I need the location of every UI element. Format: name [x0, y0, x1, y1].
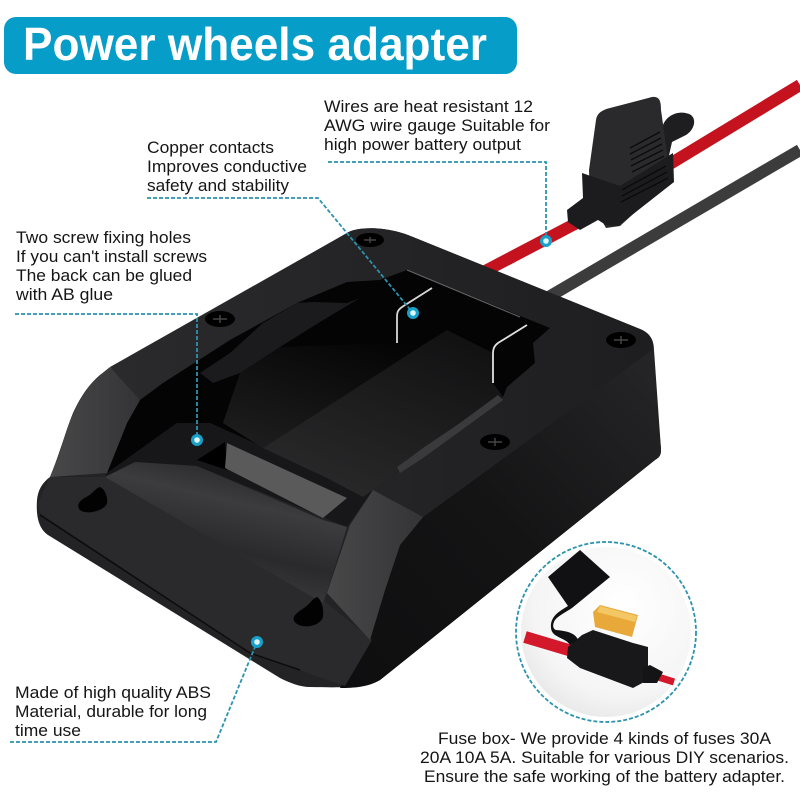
callout: fuse box: 20A 10A 5A. Suitable for various DIY scenarios. — [420, 748, 789, 767]
inset fuse holder strap and cap — [548, 550, 610, 645]
fuse inset — [516, 542, 696, 722]
callout: screw holes: If you can't install screws — [16, 247, 207, 266]
recess — [107, 270, 550, 497]
red wire — [470, 85, 800, 279]
callout: ABS material: Material, durable for long — [15, 702, 207, 721]
callout: copper contacts: Copper contacts — [147, 138, 274, 157]
callout: screw holes: with AB glue — [15, 285, 113, 304]
inset dashed ring — [516, 542, 696, 722]
screw top — [356, 233, 384, 247]
inset red wire — [525, 637, 572, 651]
recess rim highlight — [407, 270, 520, 317]
callout: ABS material — [10, 642, 257, 742]
callout: screw holes — [15, 228, 207, 440]
inline fuse holder — [567, 97, 694, 230]
front rim — [38, 477, 372, 686]
callout: wires: AWG wire gauge Suitable for — [324, 116, 550, 135]
contact left — [397, 288, 432, 343]
trench dark part — [197, 442, 227, 470]
callout: wires — [324, 97, 550, 241]
inset disc — [521, 547, 691, 717]
screw right — [606, 332, 636, 348]
marker dots — [191, 235, 552, 648]
inset fuse holder — [567, 630, 648, 688]
inset fuse blade — [593, 605, 638, 637]
callout: fuse box: Fuse box- We provide 4 kinds of fuses 30A — [438, 729, 772, 748]
callout: ABS material: Made of high quality ABS — [15, 683, 211, 702]
callout: screw holes: Two screw fixing holes — [16, 228, 191, 247]
recess floor right panel — [263, 330, 503, 497]
lower right side face — [340, 350, 661, 688]
screw bottom — [480, 434, 510, 450]
trench grey part — [225, 443, 347, 518]
body silhouette — [37, 228, 661, 687]
mounting hole left — [78, 487, 107, 512]
title banner: Power wheels adapter — [23, 18, 487, 70]
front ramp — [105, 462, 347, 603]
callout: copper contacts — [147, 138, 413, 313]
top plate — [110, 228, 652, 517]
screw left — [205, 311, 235, 327]
adapter body — [37, 228, 661, 688]
mounting hole right — [294, 597, 323, 626]
callout: wires: high power battery output — [324, 135, 521, 154]
left pillar — [50, 367, 140, 477]
callout: screw holes: The back can be glued — [16, 266, 192, 285]
callout: fuse box — [420, 729, 789, 786]
recess front ledge — [105, 423, 373, 527]
callout: copper contacts: safety and stability — [147, 176, 289, 195]
right pillar — [327, 490, 423, 640]
contact right — [493, 325, 527, 383]
callout: wires: Wires are heat resistant 12 — [324, 97, 533, 116]
right floor rail — [397, 395, 503, 473]
callout: copper contacts: Improves conductive — [147, 157, 307, 176]
inset end nub — [643, 665, 663, 683]
recess floor left panel — [223, 343, 423, 448]
callout: ABS material: time use — [15, 721, 81, 740]
callout: fuse box: Ensure the safe working of the battery adapter. — [424, 767, 785, 786]
black wire — [540, 150, 800, 302]
left clip — [200, 298, 360, 383]
